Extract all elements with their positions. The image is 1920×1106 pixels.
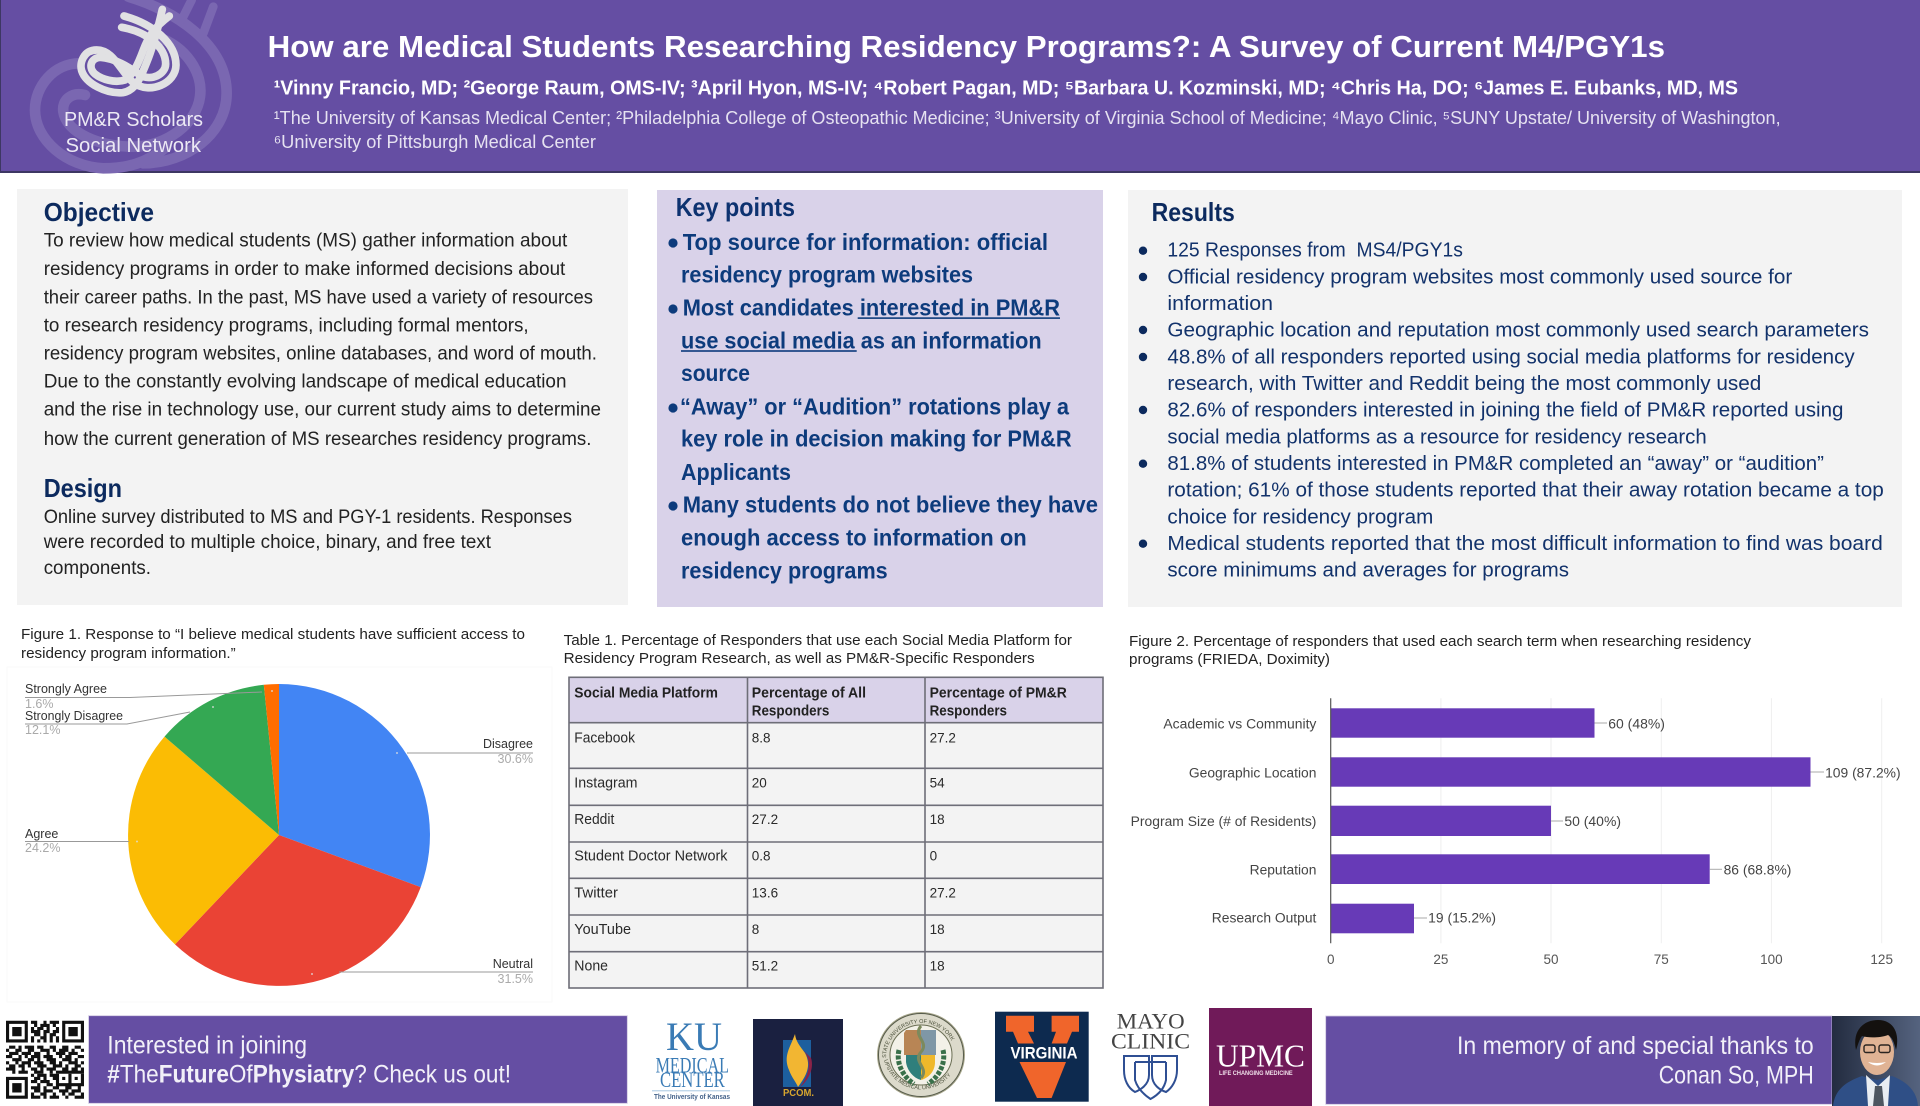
results list: Official residency program websites most commonly used source for [1167,265,1792,288]
banner: join call to action: #TheFutureOfPhysiatry? Check us out! [107,1061,511,1089]
heading: objective: Objective [44,197,154,227]
results list: score minimums and averages for programs [1167,559,1569,582]
label: strongly agree: Strongly Agree [25,682,107,696]
affiliations: ⁶University of Pittsburgh Medical Center [274,131,596,152]
row: None: None [574,959,608,975]
label: neutral [493,957,533,986]
results list: 48.8% of all responders reported using social media platforms for residency [1167,345,1855,368]
logo: UPMC: LIFE CHANGING MEDICINE [1219,1071,1293,1077]
bar: reputation [1250,854,1791,884]
caption: figure 1: residency program information.” [21,646,236,662]
affiliations [274,107,1781,152]
bar: academic vs community: 60 (48%) [1608,716,1665,731]
bar: geographic location: 109 (87.2%) [1825,765,1901,780]
row: Instagram: Instagram [574,776,638,792]
logo: SUNY Upstate seal [877,1012,965,1098]
bar: program size: Program Size (# of Residents) [1131,814,1316,829]
banner: memorial thanks: In memory of and special thanks to [1457,1032,1814,1060]
row: YouTube: 8 [752,922,759,937]
pie slice: strongly disagree [164,685,279,835]
objective text: how the current generation of MS researches residency programs. [44,428,591,450]
row: Student Doctor Network: Student Doctor Network [574,849,728,865]
key point: top source: residency program websites [681,262,973,288]
objective text: To review how medical students (MS) gather information about [44,230,568,252]
results list: Geographic location and reputation most commonly used search parameters [1167,319,1869,342]
affiliations: ¹The University of Kansas Medical Center; ²Philadelphia College of Osteopathic Medicine; ³University of Virginia School of Medicine; ⁴Mayo Clinic, ⁵SUNY Upstate/ University of Washington, [274,107,1781,128]
row: None [574,959,945,975]
logo: PM&R Scholars Social Network: Social Network [66,135,202,157]
header banner [0,0,1920,173]
pie label lines [25,692,533,972]
row: YouTube: 18 [930,922,945,937]
label: disagree [483,737,533,766]
results list: 125 Responses from MS4/PGY1s [1167,239,1463,262]
logo: KU Medical Center [652,1014,730,1101]
bar: reputation: 86 (68.8%) [1724,862,1791,877]
design text: were recorded to multiple choice, binary, and free text [43,531,492,553]
key point: away rotations [668,393,1072,485]
logo: Mayo Clinic: MAYO [1117,1008,1185,1033]
results list [1139,239,1884,582]
label: strongly disagree: 12.1% [25,723,60,737]
row: Twitter: 13.6 [752,885,778,900]
objective text: to research residency programs, including formal mentors, [44,315,529,337]
design text: components. [44,557,151,579]
logo: University of Virginia: VIRGINIA [1010,1043,1078,1062]
row: Facebook: Facebook [574,730,636,746]
caption: figure 2 [1129,634,1752,668]
row: Student Doctor Network [574,849,937,865]
table: social media platforms [569,677,1103,988]
logo: KU Medical Center: MEDICAL [656,1053,729,1078]
panel: results [1128,190,1902,607]
label: agree: Agree [25,827,58,841]
bar: program size: 50 (40%) [1564,814,1621,829]
logo: SUNY Upstate seal: STATE UNIVERSITY OF NEW YORK [882,1019,955,1058]
caption: table 1: Residency Program Research, as well as PM&R-Specific Responders [564,651,1035,667]
banner: memorial thanks [1326,1016,1832,1104]
bar: academic vs community: Academic vs Community [1163,716,1317,731]
key point: top source: Top source for information: official [683,229,1048,255]
label: agree: 24.2% [25,841,60,855]
bar: geographic location [1189,757,1901,787]
label: disagree: Disagree [483,737,533,751]
logo: KU Medical Center: The University of Kansas [654,1092,730,1101]
logo: PM&R Scholars Social Network [35,0,227,168]
results list: 81.8% of students interested in PM&R completed an “away” or “audition” [1167,452,1824,475]
heading: design: Design [44,473,122,503]
key point: access to information: residency programs [681,557,888,583]
bar: geographic location: Geographic Location [1189,765,1316,780]
label: neutral: Neutral [493,957,533,971]
bar: academic vs community [1163,708,1665,738]
icon: portrait of Conan So [1832,1016,1920,1106]
results list: Medical students reported that the most difficult information to find was board [1167,532,1883,555]
label: agree [25,827,60,855]
row: YouTube [574,922,945,938]
caption: table 1: Table 1. Percentage of Responders that use each Social Media Platform for [564,633,1072,649]
table header: Percentage of PM&R [930,685,1067,701]
logo: PM&R Scholars Social Network: PM&R Scholars [64,109,203,131]
logo: SUNY Upstate seal: UPSTATE MEDICAL UNIVERSITY [884,1059,950,1090]
row: Student Doctor Network: 0 [930,849,937,864]
objective text: residency programs in order to make informed decisions about [44,258,566,280]
row: Twitter: 27.2 [930,885,956,900]
table header: Responders [930,703,1007,719]
key point: away rotations: “Away” or “Audition” rotations play a [680,393,1069,419]
key point: social media: use social media as an information [681,327,1042,353]
pie anchor dots [136,690,398,975]
objective text: their career paths. In the past, MS have used a variety of resources [44,286,593,308]
objective text: residency program websites, online databases, and word of mouth. [44,342,597,364]
pie slice: strongly agree [264,684,279,835]
authors: ¹Vinny Francio, MD; ²George Raum, OMS-IV; ³April Hyon, MS-IV; ⁴Robert Pagan, MD; ⁵Barbara U. Kozminski, MD; ⁴Chris Ha, DO; ⁶James E. Eubanks, MD, MS [274,78,1738,100]
row: Facebook [574,730,956,746]
caption: figure 2: programs (FRIEDA, Doximity) [1129,652,1330,668]
bar: research output [1212,904,1496,933]
table header: Responders [752,703,829,719]
objective text: and the rise in technology use, our current study aims to determine [44,398,601,420]
results list: choice for residency program [1167,505,1433,528]
label: disagree: 30.6% [498,752,533,766]
x axis ticks: 125 [1870,952,1893,967]
panel: objective and design [17,189,628,605]
logo: UPMC: UPMC [1216,1038,1305,1074]
row: Facebook: 8.8 [752,730,771,745]
logo: Mayo Clinic: CLINIC [1111,1028,1190,1053]
logo: KU Medical Center: CENTER [660,1067,725,1092]
table header: Social Media Platform [574,685,718,701]
label: strongly agree: 1.6% [25,697,54,711]
logo: UPMC [1209,1008,1312,1106]
key point: top source [668,229,1048,288]
row: Facebook: 27.2 [930,730,956,745]
logo: KU Medical Center: KU [666,1014,722,1059]
pie slice: neutral [175,835,421,986]
bar chart: search terms [1131,698,1901,967]
row: Reddit: Reddit [574,812,614,828]
results list: rotation; 61% of those students reported that their away rotation became a top [1167,479,1884,502]
table header: Percentage of All [752,685,866,701]
row: Reddit: 18 [930,812,945,827]
banner: memorial thanks: Conan So, MPH [1659,1061,1814,1089]
results list: social media platforms as a resource for residency research [1167,425,1707,448]
logo: PCOM [753,1019,843,1106]
label: strongly agree [25,682,107,711]
caption: table 1 [564,633,1072,667]
caption: figure 1: Figure 1. Response to “I believe medical students have sufficient access to [21,627,525,643]
x axis ticks: 100 [1760,952,1783,967]
objective text [44,230,601,450]
row: None: 51.2 [752,959,778,974]
key point: social media [668,295,1060,386]
x axis ticks: 75 [1654,952,1669,967]
key point: away rotations: key role in decision making for PM&R [681,426,1072,452]
key point: access to information [668,492,1098,583]
bar: reputation: Reputation [1250,862,1316,877]
label: strongly disagree: Strongly Disagree [25,709,123,723]
pie slice: disagree [279,684,430,887]
objective text: Due to the constantly evolving landscape of medical education [44,370,566,392]
x axis ticks [1327,952,1893,967]
key point: access to information: enough access to information on [681,525,1027,551]
row: None: 18 [930,959,945,974]
logo: Mayo Clinic [1111,1008,1190,1099]
title: How are Medical Students Researching Residency Programs?: A Survey of Current M4/PGY1s [268,29,1665,64]
pie slice: agree [128,737,279,944]
row: YouTube: YouTube [574,922,631,938]
logo: University of Virginia [995,1012,1089,1102]
QR code [6,1021,84,1099]
label: strongly disagree [25,709,123,737]
design text [43,506,572,579]
row: Twitter: Twitter [574,885,618,901]
banner: join call to action [89,1016,627,1103]
heading: results: Results [1152,197,1235,227]
panel: key points [657,190,1103,607]
results list: 82.6% of responders interested in joining the field of PM&R reported using [1167,399,1844,422]
row: Reddit [574,812,945,828]
table header [574,685,1067,719]
key point: access to information: Many students do not believe they have [683,492,1098,518]
row: Instagram: 54 [930,776,945,791]
x axis ticks: 0 [1327,952,1334,967]
bar: program size [1131,806,1621,836]
design text: Online survey distributed to MS and PGY-1 residents. Responses [44,506,572,528]
x axis ticks: 25 [1433,952,1448,967]
row: Instagram [574,776,945,792]
banner: join call to action: Interested in joining [107,1031,307,1059]
key point: social media: source [681,360,750,386]
bar: research output: Research Output [1212,911,1317,926]
row: Instagram: 20 [752,776,767,791]
caption: figure 1 [21,627,525,662]
row: Twitter [574,885,956,901]
row: Student Doctor Network: 0.8 [752,849,771,864]
key point: away rotations: Applicants [681,459,791,485]
caption: figure 2: Figure 2. Percentage of responders that used each search term when researching residency [1129,634,1752,650]
label: neutral: 31.5% [498,972,533,986]
logo: PCOM: PCOM. [783,1087,814,1099]
row: Reddit: 27.2 [752,812,778,827]
key point: social media: Most candidates interested in PM&R [683,295,1060,321]
chart: pie of responses [7,667,552,1002]
results list: information [1167,292,1273,315]
bar: research output: 19 (15.2%) [1428,911,1496,926]
x axis ticks: 50 [1543,952,1559,967]
heading: key points: Key points [676,192,795,222]
results list: research, with Twitter and Reddit being the most commonly used [1167,372,1761,395]
